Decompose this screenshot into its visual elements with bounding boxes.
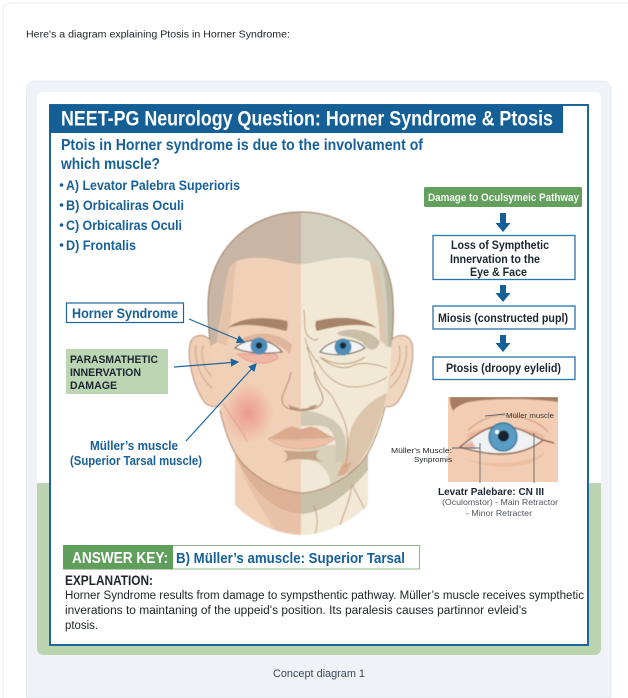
label: levator palpebrae (438, 486, 558, 518)
label: levator palpebrae: - Minor Retracter (466, 508, 532, 518)
question heading: which muscle? (60, 156, 160, 173)
explanation text: EXPLANATION: (65, 573, 153, 588)
label: Muller's Muscle symptoms (391, 448, 453, 464)
brows (228, 318, 288, 331)
arrow: step 2 (496, 285, 510, 302)
flow step: loss of innervation: Eye & Face (470, 267, 527, 279)
answer options (60, 177, 240, 253)
explanation text (65, 573, 584, 632)
icon: left ear (189, 335, 222, 407)
explanation text: Horner Syndrome results from damage to sympsthentic pathway. Müller’s muscle receives sympthetic (65, 590, 584, 602)
answer key (63, 545, 420, 570)
flow step: damage (424, 187, 582, 207)
explanation text: inverations to maintaning of the uppeid's position. Its paralesis causes partinnor evleid’s (65, 605, 527, 617)
skull outline (208, 212, 393, 340)
label: parasympathetic damage: INNERVATION (70, 367, 141, 379)
head left half (208, 212, 302, 536)
flow step: loss of innervation: Loss of Sympthetic (451, 240, 550, 252)
label: parasympathetic damage (66, 349, 168, 394)
label: parasympathetic damage: PARASMATHETIC (70, 354, 158, 366)
label: Muller muscle: Müller muscle (506, 411, 554, 420)
arrow: Muller's muscle to eye (186, 364, 256, 441)
label: Muller's muscle (70, 439, 202, 468)
flow step: miosis: Miosis (constructed pupl) (438, 313, 568, 325)
label: Muller's muscle: (Superior Tarsal muscle) (70, 454, 202, 468)
mouth (267, 427, 336, 463)
icon: right ear (380, 335, 413, 407)
answer options: B) Orbicaliras Oculi (66, 197, 184, 213)
flow step: loss of innervation (433, 236, 575, 280)
answer key: B) Müller’s amuscle: Superior Tarsal (176, 550, 405, 567)
illustration: eye detail inset (448, 397, 558, 483)
answer key: ANSWER KEY: (72, 550, 168, 567)
arrow: damage to lower lid (174, 362, 238, 367)
question heading (60, 137, 424, 173)
caption: Concept diagram 1 (273, 668, 365, 680)
illustration: face (189, 205, 413, 540)
label: Muller's Muscle symptoms: Müller's Muscle: (391, 448, 452, 455)
eye right (320, 338, 365, 364)
flow: pathway (424, 187, 582, 380)
jaw line (220, 407, 385, 493)
label: Horner Syndrome: Horner Syndrome (72, 305, 178, 321)
head right half (300, 212, 394, 536)
label: Muller's muscle: Müller’s muscle (90, 439, 178, 453)
panel: infographic frame (50, 105, 588, 645)
eye left (235, 338, 282, 363)
arrow: step 1 (496, 213, 510, 232)
flow step: ptosis (433, 357, 575, 380)
flow step: miosis (433, 306, 575, 329)
label: levator palpebrae: (Oculomstor) - Main Retractor (442, 497, 558, 507)
flow step: damage: Damage to Oculsymeic Pathway (428, 192, 580, 204)
label: levator palpebrae: Levatr Palebare: CN III (438, 486, 544, 498)
nose (282, 372, 323, 410)
answer options: A) Levator Palebra Superioris (66, 177, 240, 193)
arrow: step 3 (496, 335, 510, 352)
arrow: Horner Syndrome to eye (189, 319, 244, 342)
title: NEET-PG Neurology Question: Horner Syndrome & Ptosis (61, 108, 553, 130)
label: Muller's Muscle symptoms: Synpromis (414, 457, 453, 464)
intro sentence: Here's a diagram explaining Ptosis in Horner Syndrome: (26, 28, 290, 40)
explanation text: ptosis. (65, 620, 98, 632)
flow step: ptosis: Ptosis (droopy eylelid) (446, 363, 561, 375)
question heading: Ptois in Horner syndrome is due to the involvament of (61, 137, 424, 154)
flow step: loss of innervation: Innervation to the (450, 254, 540, 266)
answer options: D) Frontalis (66, 237, 136, 253)
head fill (208, 212, 394, 536)
answer options: C) Orbicaliras Oculi (66, 217, 182, 233)
label: parasympathetic damage: DAMAGE (70, 380, 117, 392)
